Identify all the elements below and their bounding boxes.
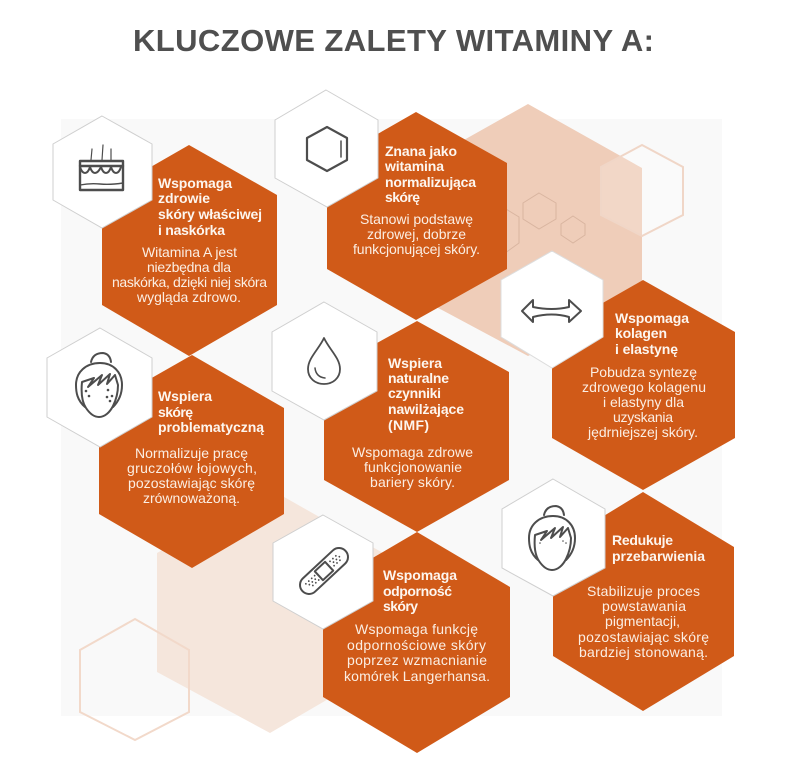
decorative large peach hexagon top (414, 104, 642, 356)
body text: Normalizuje pracę (135, 445, 248, 461)
title: KLUCZOWE ZALETY WITAMINY A: (133, 23, 654, 58)
white icon hexagon (47, 328, 152, 447)
body text: pozostawiając skórę (578, 629, 709, 645)
heading (615, 310, 689, 357)
icon: skin layers (80, 145, 123, 190)
body text: zdrowego kolagenu (582, 379, 706, 395)
white icon hexagon (53, 116, 152, 228)
body text: pigmentacji, (605, 613, 680, 629)
white icon hexagon (502, 479, 605, 596)
body text: odpornościowe skóry (347, 637, 486, 653)
panel: problem skin (47, 328, 284, 568)
heading (158, 175, 262, 238)
panel: discoloration (502, 479, 734, 711)
body text: Stanowi podstawę (360, 211, 473, 227)
body text: gruczołów łojowych, (127, 460, 257, 476)
orange hexagon (553, 492, 734, 711)
heading: problematyczną (158, 419, 264, 435)
heading: przebarwienia (612, 548, 705, 564)
body text (112, 244, 267, 305)
orange hexagon (323, 532, 510, 753)
orange hexagon (102, 145, 277, 356)
orange hexagon (327, 112, 507, 320)
body text: zrównoważoną. (143, 490, 240, 506)
icon: bandage (296, 544, 352, 598)
icon: face with faded marks (529, 506, 575, 570)
body text: jędrniejszej skóry. (587, 424, 698, 440)
heading: naturalne (388, 370, 449, 386)
body text: bariery skóry. (370, 474, 455, 490)
orange hexagon (552, 280, 735, 490)
heading: zdrowie (158, 190, 210, 206)
body text (352, 444, 473, 490)
white icon hexagon (275, 90, 378, 207)
heading: witamina (384, 158, 444, 174)
heading (612, 532, 705, 564)
background panel (61, 119, 722, 716)
white icon hexagon (272, 302, 377, 420)
heading: nawilżające (388, 401, 464, 417)
heading: skóry (383, 598, 418, 614)
panel: normalizing vitamin (275, 90, 507, 320)
heading (158, 388, 264, 435)
white icon hexagon (501, 251, 603, 368)
panel: skin immunity (273, 515, 510, 753)
body text: Wspomaga zdrowe (352, 444, 473, 460)
decorative outline hexagon bottom left (80, 619, 189, 740)
body text (353, 211, 480, 257)
body text (578, 583, 709, 660)
orange hexagon (324, 321, 509, 532)
icon: molecule (307, 127, 347, 171)
body text: funkcjonowanie (364, 459, 462, 475)
heading: Wspomaga (615, 310, 689, 326)
heading: Wspiera (158, 388, 212, 404)
panel: skin support (53, 116, 277, 356)
heading (384, 143, 476, 205)
heading: kolagen (615, 325, 667, 341)
heading: Wspomaga (383, 567, 457, 583)
panel: natural moisturizing factors (272, 302, 509, 532)
heading: skóry właściwej (158, 206, 262, 222)
body text: i elastyny dla (603, 394, 684, 410)
body text: pozostawiając skórę (128, 475, 255, 491)
heading: skórę (385, 189, 420, 205)
decorative pale peach hexagon bottom (157, 489, 383, 733)
heading: i elastynę (615, 341, 678, 357)
heading: czynniki (388, 385, 441, 401)
heading: Znana jako (385, 143, 457, 159)
body text: poprzez wzmacnianie (347, 652, 487, 668)
heading: normalizująca (385, 174, 476, 190)
heading: Wspomaga (158, 175, 232, 191)
body text: funkcjonującej skóry. (353, 241, 480, 257)
body text: Wspomaga funkcję (355, 621, 478, 637)
heading: (NMF) (388, 417, 429, 433)
heading: skórę (158, 404, 193, 420)
decorative small hexagon one (523, 193, 556, 229)
body text: Stabilizuje proces (587, 583, 700, 599)
body text: Witamina A jest (142, 244, 237, 260)
icon: face with blemishes (76, 353, 122, 417)
body text: niezbędna dla (147, 259, 231, 275)
body text: bardziej stonowaną. (579, 644, 708, 660)
body text: naskórka, dzięki niej skóra (112, 274, 267, 290)
body text: zdrowej, dobrze (367, 226, 466, 242)
body text (127, 445, 257, 506)
icon: stretch arrow (522, 300, 581, 322)
decorative small hexagon three (483, 206, 519, 256)
white icon hexagon (273, 515, 373, 629)
body text (582, 364, 706, 440)
body text: wygląda zdrowo. (136, 289, 241, 305)
heading: i naskórka (158, 222, 225, 238)
decorative outline hexagon top right (601, 145, 683, 236)
panel: collagen and elastin (501, 251, 735, 490)
orange hexagon (99, 355, 284, 568)
decorative small hexagon two (561, 216, 585, 243)
heading: Redukuje (612, 532, 673, 548)
body text: Pobudza syntezę (590, 364, 697, 380)
heading (388, 355, 464, 433)
body text: komórek Langerhansa. (344, 668, 490, 684)
body text: uzyskania (613, 409, 673, 425)
heading: Wspiera (388, 355, 442, 371)
heading (383, 567, 457, 614)
icon: water drop (308, 338, 340, 384)
body text (344, 621, 490, 684)
heading: odporność (383, 583, 452, 599)
body text: powstawania (602, 598, 686, 614)
